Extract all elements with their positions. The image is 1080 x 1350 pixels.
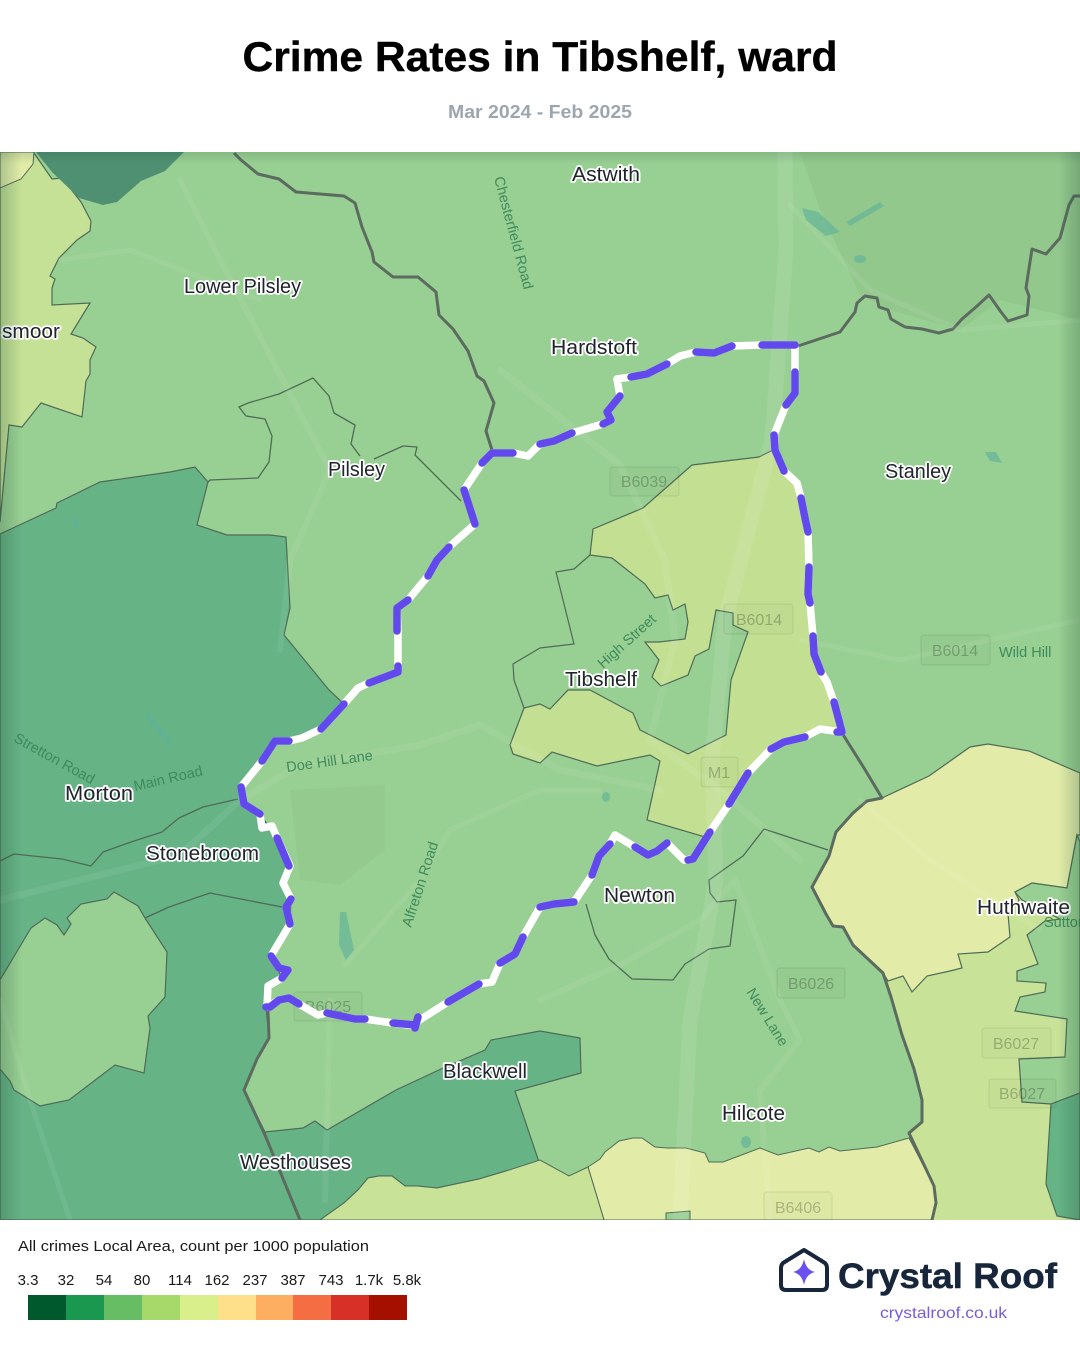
place labels: Astwith [572, 164, 640, 186]
legend values: 162 [204, 1272, 230, 1289]
legend values: 5.8k [393, 1272, 422, 1289]
road label: Stretton Road: Stretton Road [11, 731, 97, 788]
legend colour ramp [28, 1295, 407, 1320]
road label: Wild Hill: Wild Hill [999, 645, 1051, 661]
road shield: B6014 centre: B6014 [736, 612, 782, 629]
logo: Crystal Roof [781, 1250, 1057, 1322]
road shield: B6014 centre [724, 604, 793, 634]
water bodies [72, 202, 1002, 1148]
place labels: Stanley [885, 461, 951, 483]
road shield: B6026 [777, 968, 845, 998]
road label: Main Road: Main Road [132, 764, 204, 795]
road shield: B6027 north: B6027 [993, 1036, 1039, 1053]
place labels: Pilsley [328, 459, 385, 481]
land cover: darker north-east [800, 152, 1080, 330]
area: darkest green north-west [36, 152, 184, 205]
title: Crime Rates in Tibshelf, ward [242, 33, 838, 80]
area: dark green south-east [1046, 1093, 1080, 1220]
area: Sutton green [1015, 835, 1080, 1104]
area: pale corner [0, 152, 34, 188]
road shield: B6027 north [982, 1028, 1051, 1058]
road shield: B6025 [294, 992, 362, 1021]
area: yellow-green south-east [883, 880, 1080, 1220]
road label: New Lane: New Lane [743, 986, 791, 1049]
icon: house with star [781, 1250, 827, 1290]
map base: light green areas [0, 152, 1080, 1220]
area: yellow-green north-west [0, 152, 96, 522]
road shield: B6025: B6025 [305, 999, 351, 1016]
logo wordmark: Crystal Roof [838, 1257, 1057, 1296]
road label: Doe Hill Lane: Doe Hill Lane [285, 748, 374, 776]
choropleth map [0, 152, 1080, 1222]
area boundaries: thin lines [0, 378, 828, 980]
area: dark green west [0, 467, 581, 1220]
district boundaries: thick lines [234, 153, 1080, 1220]
place labels: Tibshelf [565, 669, 637, 691]
legend values: 114 [168, 1272, 192, 1289]
legend values: 1.7k [355, 1272, 384, 1289]
map edge shading [0, 152, 1080, 1220]
legend values: 237 [242, 1272, 268, 1289]
place labels: Lower Pilsley [184, 276, 301, 298]
legend values: 3.3 [18, 1272, 38, 1289]
legend title: All crimes Local Area, count per 1000 population [18, 1238, 369, 1255]
roads [0, 152, 1080, 1220]
place labels: Blackwell [443, 1061, 527, 1083]
road shield: B6039: B6039 [621, 474, 667, 491]
legend values: 387 [280, 1272, 306, 1289]
place labels: Westhouses [240, 1152, 351, 1174]
area: yellow-green central [510, 450, 840, 837]
subtitle: date range: Mar 2024 - Feb 2025 [448, 101, 632, 122]
area: small green patch south [666, 1211, 690, 1220]
road label: High Street: High Street [595, 612, 660, 672]
legend values: 32 [58, 1272, 74, 1289]
land cover: darker ward centre [290, 785, 385, 885]
road shield: B6406: B6406 [775, 1200, 821, 1217]
place labels: smoor [2, 321, 60, 343]
area: Huthwaite pale yellow [812, 744, 1080, 992]
area: pale yellow south [588, 1138, 936, 1220]
ward boundary: purple dashes [241, 345, 842, 1028]
place labels [2, 164, 1070, 1174]
area: yellow-green south [320, 1160, 604, 1220]
place labels: Newton [604, 885, 675, 907]
road label: Chesterfield Road: Chesterfield Road [490, 175, 536, 291]
legend values: 54 [96, 1272, 112, 1289]
road shield: B6027 south: B6027 [999, 1086, 1045, 1103]
area: light green island [0, 892, 167, 1106]
place labels: Hardstoft [551, 337, 637, 359]
area: Tibshelf green island [513, 555, 748, 754]
road shield: B6014 east: B6014 [932, 643, 978, 660]
road shield: B6406 [764, 1192, 832, 1222]
logo url: crystalroof.co.uk [880, 1305, 1008, 1322]
road label: Alfreton Road: Alfreton Road [400, 840, 442, 929]
legend values: 80 [134, 1272, 150, 1289]
legend [18, 1238, 422, 1320]
legend values [18, 1272, 422, 1289]
road shield: B6039 [610, 467, 679, 496]
legend values: 743 [318, 1272, 344, 1289]
place labels: Huthwaite [977, 897, 1070, 919]
road shield: B6014 east [921, 635, 990, 665]
road shield: M1: M1 [708, 765, 730, 782]
place labels: Hilcote [722, 1103, 785, 1125]
ward boundary: white base line [241, 345, 842, 1026]
road shield: B6026: B6026 [788, 976, 834, 993]
place labels: Stonebroom [146, 843, 259, 865]
place labels: Morton [65, 783, 133, 805]
road shield: M1 [701, 757, 738, 787]
road shield: B6027 south [989, 1079, 1056, 1108]
